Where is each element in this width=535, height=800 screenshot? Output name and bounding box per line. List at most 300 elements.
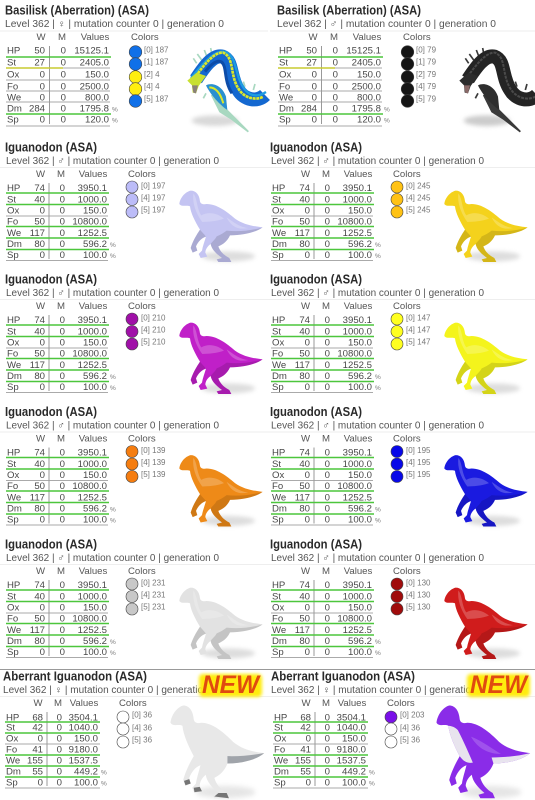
panel: Iguanodon lavender <box>0 140 265 262</box>
stats table: 0 <box>60 625 65 636</box>
stats table: St <box>7 326 16 338</box>
colors legend: [1] 187 <box>144 58 169 66</box>
colors legend: Colors <box>128 301 156 312</box>
stats table: HP <box>279 46 292 56</box>
stats table: 80 <box>34 239 45 250</box>
stats table: Ox <box>7 206 19 216</box>
panel: Aberrant Iguanodon purple <box>265 670 535 798</box>
stats table: 120.0 <box>85 114 109 126</box>
stats table: W <box>33 698 43 709</box>
stats table: 1537.5 <box>337 756 366 766</box>
icon: orange iguanodon <box>179 455 263 526</box>
stats table: 0 <box>333 114 338 126</box>
stats table: Values <box>70 698 99 709</box>
stats table: 800.0 <box>85 92 109 104</box>
stats table: Dm <box>274 766 289 778</box>
stats table: 40 <box>299 326 310 338</box>
stats table: Ox <box>7 70 19 80</box>
colors legend: [2] 4 <box>144 70 160 79</box>
stats table: 0 <box>333 58 338 68</box>
colors legend <box>391 169 431 218</box>
stats table: 0 <box>312 82 317 92</box>
stats table: 0 <box>61 82 66 92</box>
colors legend: [1] 79 <box>416 58 437 66</box>
stats table: 100.0 <box>348 647 372 658</box>
stats table: M <box>322 566 330 577</box>
stats table: Sp <box>7 382 19 393</box>
stats table: 2405.0 <box>352 58 381 68</box>
stats table: 0 <box>325 338 330 348</box>
stats table: 2500.0 <box>352 82 381 92</box>
stats table: 80 <box>34 636 45 647</box>
stats table: Dm <box>272 239 287 250</box>
stats table: 0 <box>306 778 311 788</box>
stats table: Sp <box>7 250 19 261</box>
stats table: 449.2 <box>74 766 98 778</box>
colors legend: [4] 36 <box>400 724 421 732</box>
stats table: We <box>272 492 286 504</box>
panel: Basilisk black <box>270 4 535 132</box>
panel: Iguanodon orange <box>0 405 265 526</box>
stats table: 0 <box>57 778 62 788</box>
stats table: % <box>110 253 116 260</box>
stats table: 596.2 <box>83 504 107 514</box>
stats table: 150.0 <box>348 602 372 614</box>
stats table: We <box>279 92 293 104</box>
panel: Iguanodon amber <box>265 140 535 262</box>
colors legend <box>126 301 166 350</box>
stats table: 150.0 <box>85 70 109 80</box>
stats table: 2500.0 <box>80 82 109 92</box>
colors legend: [0] 36 <box>132 710 153 720</box>
stats table <box>6 169 116 261</box>
stats table: 0 <box>305 250 310 261</box>
colors legend: [5] 210 <box>141 338 166 346</box>
stats table <box>6 301 116 393</box>
stats table: M <box>322 169 330 180</box>
stats table: 0 <box>305 338 310 348</box>
stats table: 0 <box>325 580 330 591</box>
colors legend: [5] 245 <box>406 206 431 214</box>
stats table: We <box>272 625 286 636</box>
stats table: 10800.0 <box>72 216 107 228</box>
stats table: 1537.5 <box>69 756 98 766</box>
stats table: 0 <box>325 315 330 326</box>
stats table: % <box>375 650 381 657</box>
stats table: 1000.0 <box>78 459 107 470</box>
stats table: 0 <box>60 492 65 504</box>
stats table: Fo <box>7 216 18 228</box>
stats table: 0 <box>325 722 330 734</box>
stats table: 0 <box>333 82 338 92</box>
level line: Level 362 | ♂ | mutation counter 0 | generation 0 <box>271 288 484 299</box>
stats table: 0 <box>57 766 62 778</box>
stats table: Values <box>344 301 373 312</box>
colors legend: [0] 187 <box>144 46 169 54</box>
stats table: 0 <box>60 183 65 194</box>
stats table: 0 <box>305 382 310 393</box>
colors legend: [5] 36 <box>132 736 153 744</box>
colors legend: Colors <box>128 169 156 180</box>
icon: gray iguanodon <box>179 588 263 659</box>
stats table: Fo <box>272 481 283 492</box>
stats table: 1000.0 <box>78 592 107 602</box>
stats table: M <box>58 32 66 43</box>
stats table: Fo <box>6 744 17 756</box>
stats table: 0 <box>325 326 330 338</box>
stats table: 155 <box>27 756 43 766</box>
level line: Level 362 | ♀ | mutation counter 0 | generation 0 <box>3 685 217 696</box>
stats table: 50 <box>299 481 310 492</box>
colors legend: [5] 36 <box>400 736 421 744</box>
stats table: Fo <box>272 348 283 360</box>
stats table: 100.0 <box>83 514 107 526</box>
stats table: 50 <box>299 614 310 624</box>
stats table: 0 <box>325 744 330 756</box>
stats table: 1252.5 <box>343 228 372 239</box>
stats table: 74 <box>299 315 311 326</box>
stats table: 10800.0 <box>337 481 372 492</box>
stats table: 1252.5 <box>78 625 107 636</box>
stats table <box>5 698 107 788</box>
stats table: 117 <box>295 625 310 636</box>
stats table: 117 <box>30 492 45 504</box>
stats table: Ox <box>272 338 284 348</box>
stats table: Ox <box>272 470 284 481</box>
stats table: 0 <box>305 647 310 658</box>
stats table: 9180.0 <box>69 744 98 756</box>
colors legend: Colors <box>131 32 159 43</box>
stats table: 80 <box>299 239 310 250</box>
stats table: 1040.0 <box>69 722 98 734</box>
stats table: 50 <box>34 348 45 360</box>
panel: Basilisk blue <box>0 4 268 132</box>
stats table: St <box>6 722 15 734</box>
stats table: M <box>57 301 65 312</box>
stats table: 27 <box>34 58 45 68</box>
stats table: 0 <box>57 734 62 744</box>
stats table: 1252.5 <box>78 360 107 371</box>
icon: black basilisk <box>459 48 535 132</box>
stats table: 449.2 <box>342 766 366 778</box>
stats table: Ox <box>279 70 291 80</box>
stats table: St <box>7 58 16 68</box>
stats table: 0 <box>57 722 62 734</box>
colors legend: [0] 130 <box>406 578 431 588</box>
colors legend: [5] 139 <box>141 470 166 479</box>
stats table: We <box>272 360 286 371</box>
stats table: 3950.1 <box>78 183 107 194</box>
stats table: 3950.1 <box>78 448 107 458</box>
stats table: 40 <box>34 459 45 470</box>
stats table: HP <box>7 448 20 458</box>
stats table: 10800.0 <box>337 216 372 228</box>
stats table: 117 <box>30 360 45 371</box>
stats table: Sp <box>272 647 284 658</box>
stats table: 80 <box>299 371 310 382</box>
stats table: 0 <box>40 250 45 261</box>
stats table: 15125.1 <box>74 46 109 56</box>
stats table: % <box>110 639 116 646</box>
stats table: 0 <box>40 206 45 216</box>
stats table: 1252.5 <box>343 625 372 636</box>
stats table: 40 <box>299 194 310 206</box>
icon: amber iguanodon <box>444 191 528 262</box>
stats table: 0 <box>333 46 338 56</box>
stats table: 50 <box>299 348 310 360</box>
stats table: 0 <box>325 504 330 514</box>
stats table: % <box>375 639 381 646</box>
colors legend: [5] 187 <box>144 94 169 104</box>
colors legend: [4] 139 <box>141 458 166 467</box>
stats table: 3950.1 <box>343 183 372 194</box>
stats table: Ox <box>7 338 19 348</box>
colors legend: [0] 79 <box>416 46 437 54</box>
stats table: 0 <box>325 239 330 250</box>
title: Iguanodon (ASA) <box>5 538 97 552</box>
stats table <box>6 434 116 526</box>
stats table: 0 <box>40 70 45 80</box>
stats table: 0 <box>305 602 310 614</box>
stats table: % <box>110 385 116 392</box>
stats table: 596.2 <box>348 636 372 647</box>
stats table: 0 <box>61 114 66 126</box>
colors legend: [0] 210 <box>141 314 166 322</box>
stats table: St <box>7 459 16 470</box>
stats table: % <box>101 780 107 788</box>
level line: Level 362 | ♀ | mutation counter 0 | generation 0 <box>271 685 485 696</box>
colors legend <box>126 169 166 218</box>
stats table: Dm <box>7 104 22 114</box>
stats table: 68 <box>300 712 311 724</box>
stats table: 0 <box>312 92 317 104</box>
stats table: % <box>101 770 107 776</box>
colors legend: [5] 195 <box>406 470 431 479</box>
stats table: 117 <box>295 228 310 239</box>
stats table: HP <box>7 46 20 56</box>
colors legend: [5] 130 <box>406 602 431 612</box>
stats table: We <box>7 625 21 636</box>
stats table: 3950.1 <box>78 580 107 591</box>
stats table: 0 <box>40 470 45 481</box>
stats table: Dm <box>272 371 287 382</box>
colors legend: [4] 197 <box>141 194 166 202</box>
stats table: W <box>36 434 46 444</box>
panel: Iguanodon yellow <box>265 272 535 394</box>
stats table: 117 <box>295 492 310 504</box>
stats table: 0 <box>60 504 65 514</box>
title: Basilisk (Aberration) (ASA) <box>5 4 149 18</box>
stats table: 0 <box>60 326 65 338</box>
colors legend: [4] 231 <box>141 590 166 600</box>
stats table: 0 <box>60 239 65 250</box>
colors legend: [0] 195 <box>406 446 431 455</box>
stats table: 80 <box>299 504 310 514</box>
colors legend: [4] 130 <box>406 590 431 600</box>
stats table: 150.0 <box>348 206 372 216</box>
stats table: Values <box>81 32 110 43</box>
title: Iguanodon (ASA) <box>5 140 97 154</box>
colors legend: [0] 147 <box>406 314 431 322</box>
stats table: 42 <box>32 722 43 734</box>
stats table: 0 <box>325 602 330 614</box>
panel: Iguanodon red <box>265 538 535 659</box>
stats table: 0 <box>60 459 65 470</box>
stats table: W <box>308 32 318 43</box>
stats table: 150.0 <box>342 734 366 744</box>
stats table: 100.0 <box>83 647 107 658</box>
stats table: 9180.0 <box>337 744 366 756</box>
stats table: W <box>301 698 311 709</box>
stats table: 80 <box>34 371 45 382</box>
stats table: 0 <box>312 114 317 126</box>
colors legend <box>391 566 431 615</box>
stats table: 150.0 <box>83 470 107 481</box>
stats table: 100.0 <box>83 250 107 261</box>
stats table: St <box>272 194 281 206</box>
stats table: % <box>375 242 381 249</box>
stats table: 0 <box>325 371 330 382</box>
stats table: 0 <box>40 92 45 104</box>
stats table: % <box>112 118 118 124</box>
stats table: 0 <box>60 250 65 261</box>
stats table: Ox <box>272 602 284 614</box>
stats table: 0 <box>312 70 317 80</box>
stats table: 1000.0 <box>343 326 372 338</box>
stats table: Fo <box>7 82 18 92</box>
badge: NEW: NEW <box>470 671 529 699</box>
colors legend: [0] 139 <box>141 446 166 455</box>
icon: blue iguanodon <box>444 455 528 526</box>
colors legend: Colors <box>393 169 421 180</box>
stats table: 0 <box>60 206 65 216</box>
colors legend: [4] 245 <box>406 194 431 202</box>
stats table: 150.0 <box>74 734 98 744</box>
stats table: Values <box>79 169 108 180</box>
stats table: 0 <box>60 580 65 591</box>
stats table: Values <box>344 566 373 577</box>
stats table: 3950.1 <box>78 315 107 326</box>
level line: Level 362 | ♂ | mutation counter 0 | generation 0 <box>271 420 484 432</box>
stats table: 100.0 <box>348 250 372 261</box>
stats table: % <box>384 118 390 124</box>
stats table: Values <box>344 434 373 444</box>
colors legend <box>129 32 169 107</box>
stats table: 0 <box>60 481 65 492</box>
stats table: 0 <box>61 70 66 80</box>
stats table: 0 <box>60 338 65 348</box>
colors legend: [0] 231 <box>141 578 166 588</box>
stats table: 0 <box>40 514 45 526</box>
colors legend: [4] 195 <box>406 458 431 467</box>
stats table: 0 <box>325 712 330 724</box>
colors legend: Colors <box>403 32 431 43</box>
stats table: 0 <box>61 104 66 114</box>
stats table: 50 <box>299 216 310 228</box>
colors legend: Colors <box>393 566 421 577</box>
colors legend: [4] 79 <box>416 82 437 91</box>
stats table: 155 <box>295 756 311 766</box>
level line: Level 362 | ♂ | mutation counter 0 | generation 0 <box>271 553 484 564</box>
stats table: 74 <box>299 183 311 194</box>
colors legend <box>126 566 166 615</box>
stats table: 0 <box>40 647 45 658</box>
stats table: 41 <box>300 744 311 756</box>
stats table: 117 <box>30 228 45 239</box>
stats table: 0 <box>333 70 338 80</box>
colors legend: [2] 79 <box>416 70 437 79</box>
stats table: 0 <box>325 183 330 194</box>
colors legend <box>117 698 153 748</box>
level line: Level 362 | ♂ | mutation counter 0 | generation 0 <box>6 420 219 432</box>
stats table: 0 <box>305 514 310 526</box>
stats table: Dm <box>7 504 22 514</box>
icon: yellow iguanodon <box>444 323 528 394</box>
stats table: 0 <box>60 371 65 382</box>
panel: Aberrant Iguanodon white <box>0 670 265 798</box>
stats table: St <box>272 459 281 470</box>
stats table: 1000.0 <box>343 459 372 470</box>
stats table: 10800.0 <box>72 614 107 624</box>
stats table: We <box>7 492 21 504</box>
stats table: 100.0 <box>348 514 372 526</box>
colors legend: [4] 4 <box>144 82 160 91</box>
stats table: Sp <box>7 514 19 526</box>
stats table: 1795.8 <box>352 104 381 114</box>
stats table: 55 <box>32 766 43 778</box>
stats table: Sp <box>274 778 286 788</box>
stats table: 0 <box>325 636 330 647</box>
stats table: HP <box>274 712 287 724</box>
stats table: 0 <box>57 712 62 724</box>
stats table: 0 <box>57 756 62 766</box>
stats table: 0 <box>325 647 330 658</box>
stats table: 0 <box>38 778 43 788</box>
stats table: % <box>369 770 375 776</box>
stats table: HP <box>272 448 285 458</box>
stats table: 0 <box>61 58 66 68</box>
stats table: 80 <box>299 636 310 647</box>
stats table <box>271 434 381 526</box>
stats table: 0 <box>60 592 65 602</box>
stats table: St <box>272 326 281 338</box>
stats table: 100.0 <box>83 382 107 393</box>
stats table: Ox <box>7 470 19 481</box>
icon: purple iguanodon <box>179 323 263 394</box>
stats table: 0 <box>60 194 65 206</box>
stats table <box>271 566 381 658</box>
colors legend: [0] 203 <box>400 710 425 720</box>
stats table: Ox <box>272 206 284 216</box>
stats table: Dm <box>7 239 22 250</box>
stats table: HP <box>272 183 285 194</box>
stats table: 10800.0 <box>337 614 372 624</box>
stats table: Ox <box>7 602 19 614</box>
stats table: 0 <box>325 206 330 216</box>
colors legend: [4] 210 <box>141 326 166 334</box>
stats table: 117 <box>295 360 310 371</box>
colors legend <box>391 301 431 350</box>
stats table: W <box>36 566 46 577</box>
stats table: Dm <box>272 636 287 647</box>
stats table: 1000.0 <box>78 326 107 338</box>
stats table: Fo <box>7 614 18 624</box>
stats table: 0 <box>60 448 65 458</box>
stats table: W <box>301 169 311 180</box>
colors legend: [0] 197 <box>141 182 166 190</box>
stats table: 150.0 <box>357 70 381 80</box>
stats table: 1000.0 <box>343 592 372 602</box>
